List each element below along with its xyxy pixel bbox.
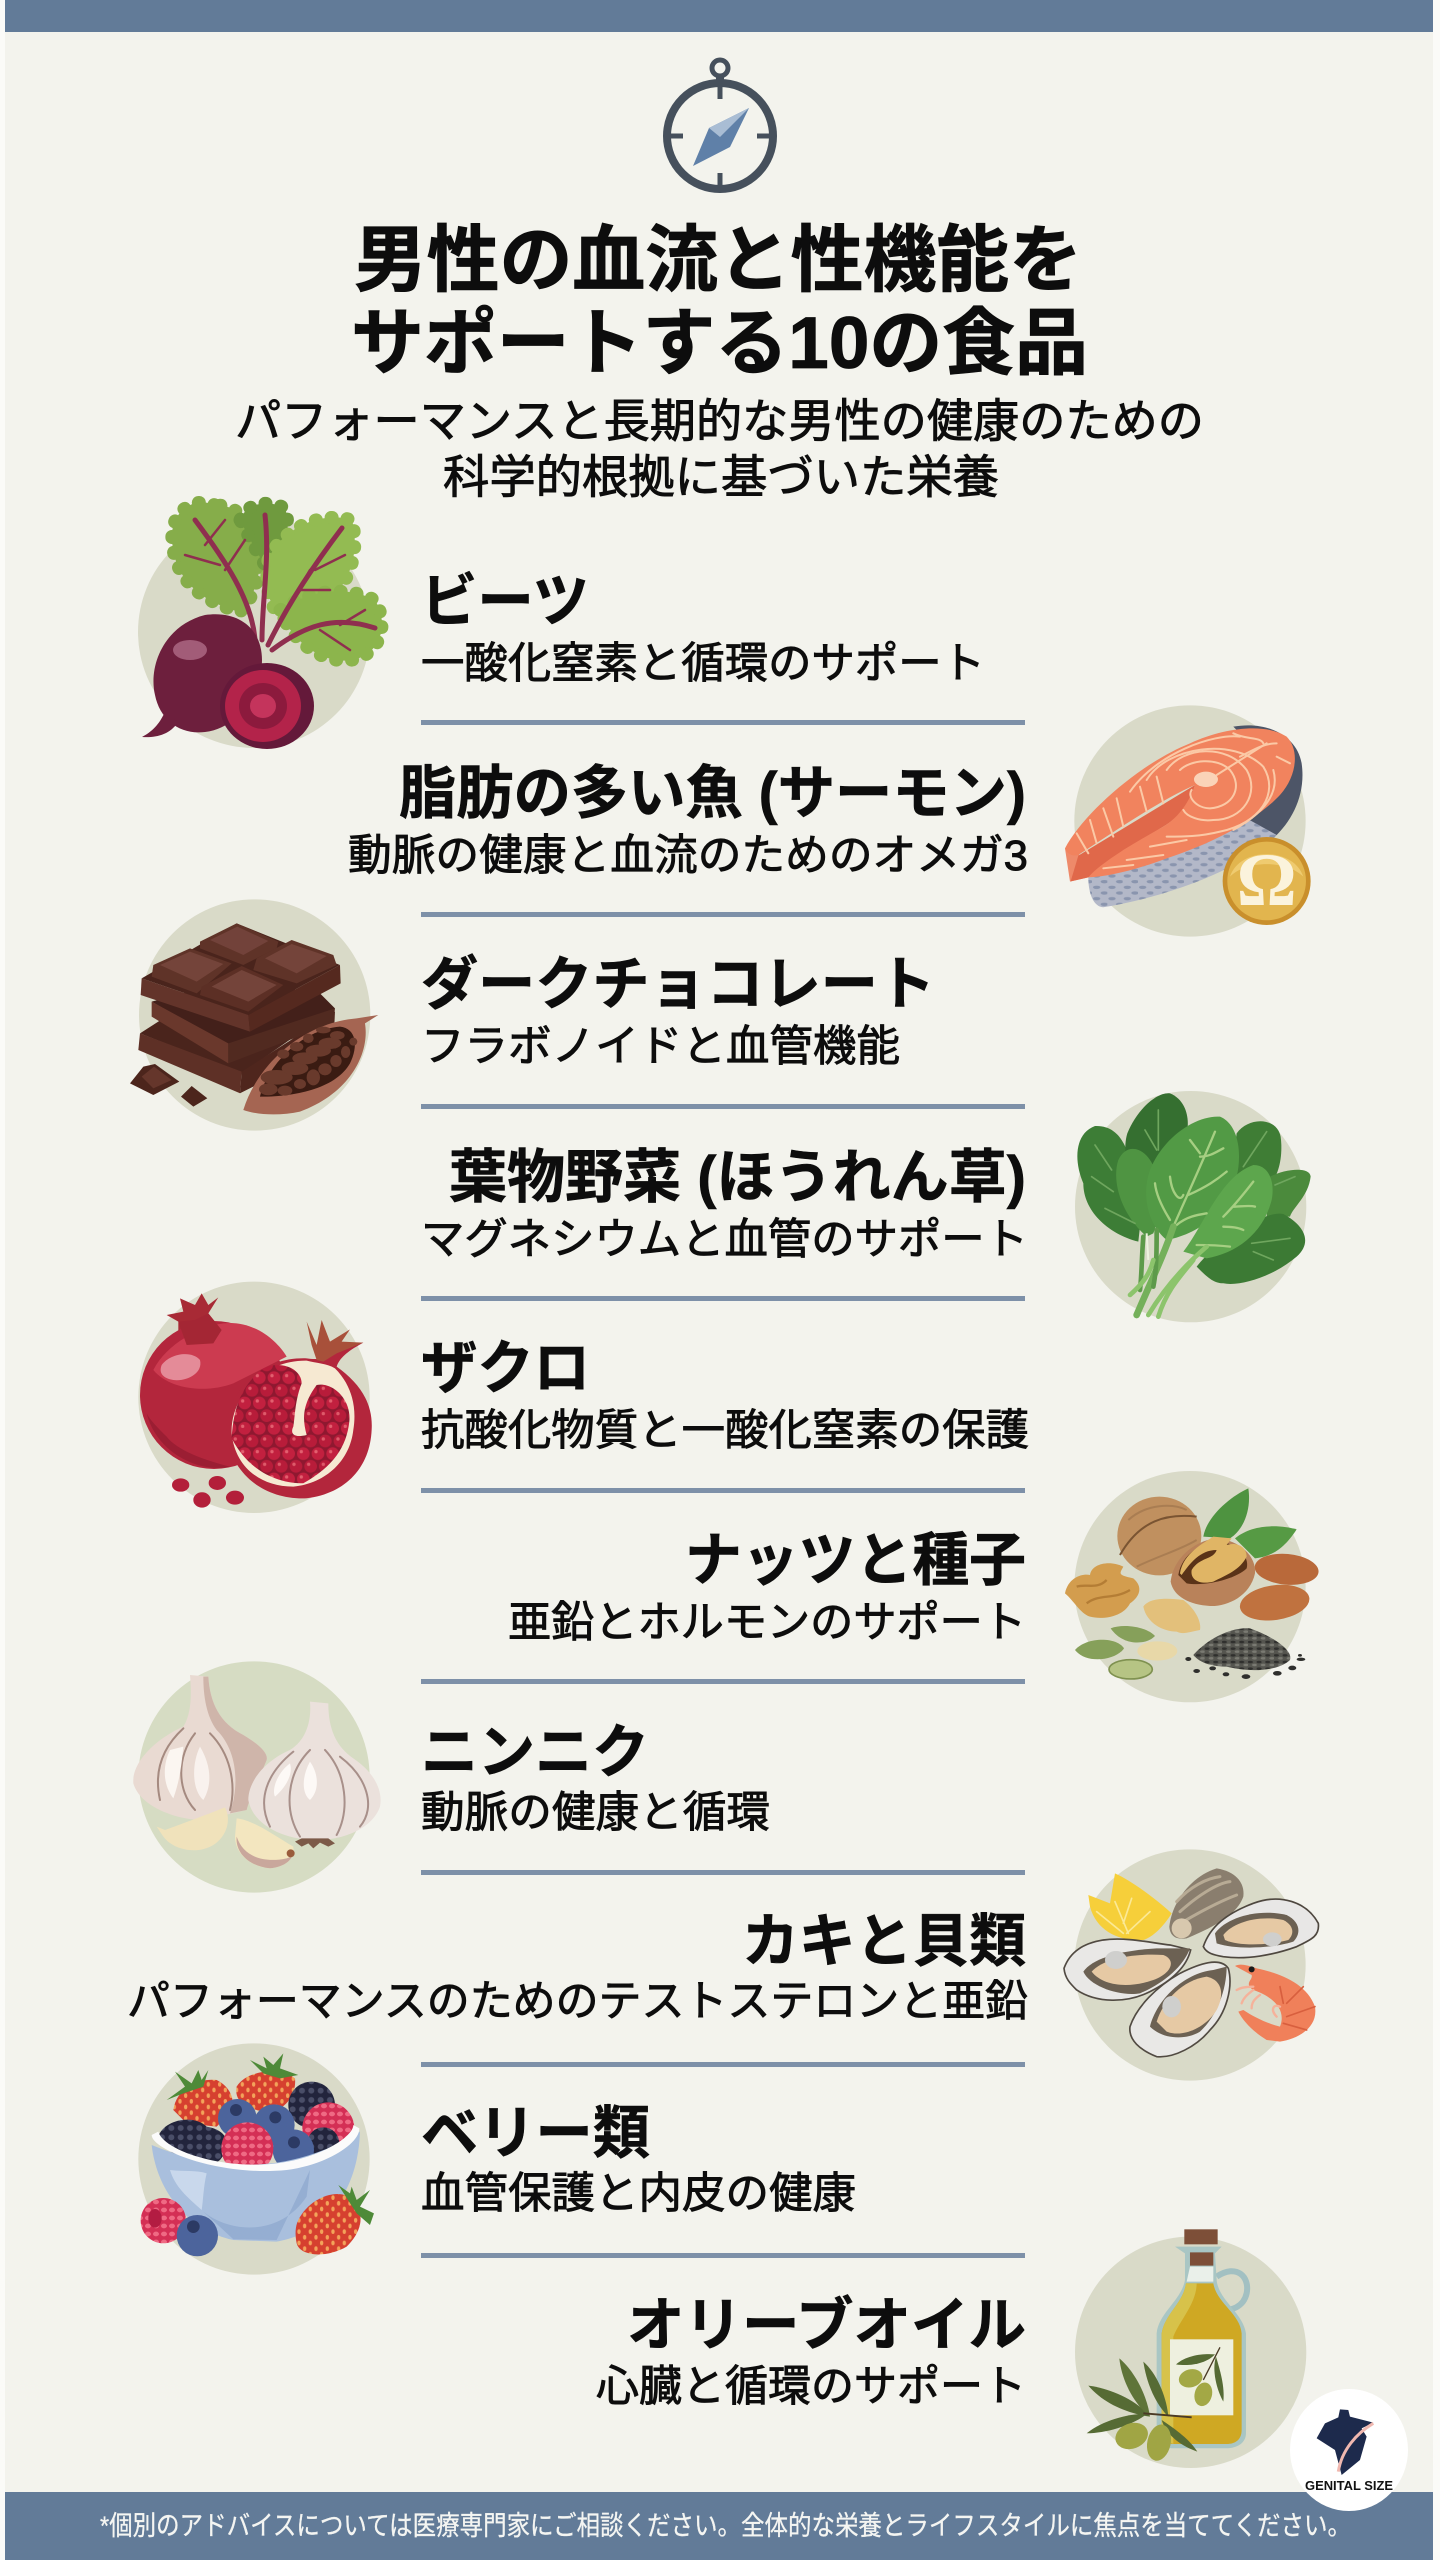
heading: ベリー類 (421, 2101, 650, 2166)
subtitle: 科学的根拠に基づいた栄養 (443, 451, 999, 503)
description: 動脈の健康と血流のためのオメガ3 (348, 832, 1028, 880)
item 5: pomegranate (138, 1282, 1029, 1513)
icon: salmon steak with omega coin: Ω (1237, 839, 1297, 922)
description: パフォーマンスのためのテストステロンと亜鉛 (127, 1978, 1028, 2026)
item 10: olive oil (596, 2229, 1306, 2468)
heading: ザクロ (421, 1336, 590, 1401)
heading: ナッツと種子 (685, 1528, 1026, 1593)
title (351, 220, 1088, 384)
icon: garlic (133, 1661, 381, 1893)
subtitle (235, 395, 1204, 503)
description: 動脈の健康と循環 (421, 1789, 770, 1837)
description: 心臓と循環のサポート (596, 2363, 1026, 2411)
heading: ニンニク (421, 1720, 649, 1785)
logo wordmark: GENITAL SIZE (1305, 2478, 1393, 2493)
item 2: salmon (348, 705, 1311, 937)
description: 一酸化窒素と循環のサポート (421, 640, 985, 688)
heading: オリーブオイル (627, 2293, 1026, 2358)
item 9: berries (138, 2043, 856, 2275)
item 8: oysters and shellfish (127, 1849, 1318, 2081)
subtitle: パフォーマンスと長期的な男性の健康のための (235, 395, 1204, 447)
icon: beet (138, 502, 382, 749)
footer band (5, 2492, 1433, 2560)
logo badge (1290, 2389, 1408, 2511)
heading: カキと貝類 (742, 1909, 1026, 1974)
item 6: nuts and seeds (508, 1471, 1320, 1702)
icon: chocolate and cacao pod (130, 899, 378, 1131)
icon: berries in a bowl (138, 2043, 374, 2275)
icon: compass (667, 60, 773, 189)
icon: olive oil bottle (1075, 2229, 1306, 2468)
heading: ビーツ (421, 569, 589, 634)
heading: 葉物野菜 (ほうれん草) (449, 1145, 1026, 1210)
title: 男性の血流と性機能を (354, 220, 1082, 301)
description: 抗酸化物質と一酸化窒素の保護 (421, 1407, 1029, 1455)
icon: nuts and seeds (1065, 1471, 1320, 1702)
title: サポートする10の食品 (351, 303, 1088, 384)
icon: pomegranate (138, 1282, 372, 1513)
heading: ダークチョコレート (421, 952, 935, 1017)
description: マグネシウムと血管のサポート (421, 1216, 1028, 1264)
icon: spinach (1075, 1091, 1311, 1322)
description: フラボノイドと血管機能 (421, 1023, 900, 1071)
item 4: leafy greens (421, 1091, 1311, 1322)
icon: oysters, lemon and shrimp (1064, 1849, 1318, 2081)
description: 血管保護と内皮の健康 (421, 2170, 856, 2218)
item 1: beets (138, 502, 985, 749)
logo mark (1317, 2409, 1373, 2475)
item 7: garlic (133, 1661, 770, 1893)
description: 亜鉛とホルモンのサポート (508, 1599, 1026, 1647)
top band (5, 0, 1433, 32)
heading: 脂肪の多い魚 (サーモン) (399, 761, 1026, 826)
icon: salmon steak with omega coin (1065, 705, 1311, 937)
item 3: dark chocolate (130, 899, 935, 1131)
